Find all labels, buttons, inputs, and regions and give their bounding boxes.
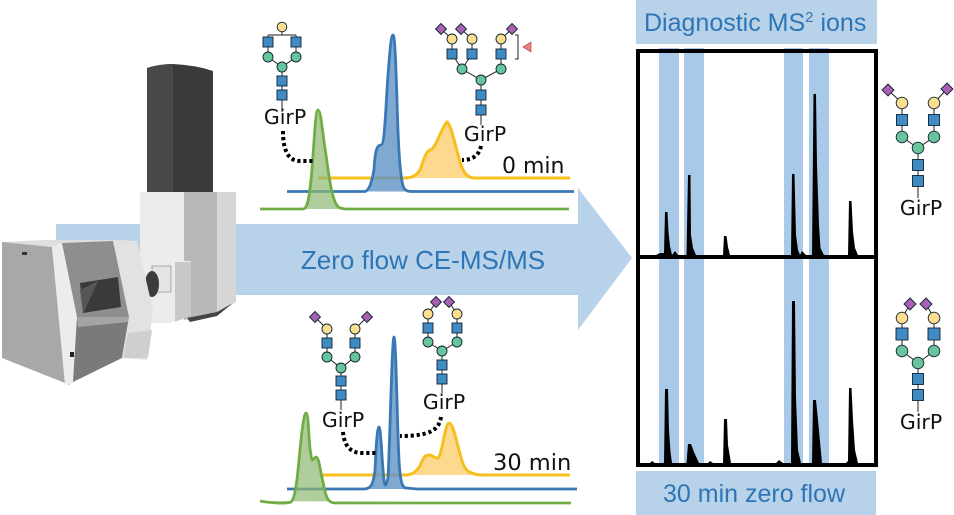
glycan: bottom left: GirP xyxy=(322,408,364,432)
glycan: top left xyxy=(263,22,306,129)
dotted connector: right glycan to yellow peak xyxy=(462,146,481,160)
glycan: bottom right xyxy=(423,296,465,414)
chromatogram: 30 min xyxy=(260,337,577,503)
yellow trace 0 min xyxy=(318,122,570,178)
header: diagnostic MS2 ions xyxy=(636,0,877,44)
glycan: bottom right: GirP xyxy=(423,390,465,414)
glycan: top right with fucose: GirP xyxy=(464,122,506,146)
glycan: top right with fucose xyxy=(436,24,531,146)
spectrum: 0 min xyxy=(640,94,874,258)
label: zero flow CE-MS/MS: Zero flow CE-MS/MS xyxy=(301,245,545,275)
glycan: right top xyxy=(882,83,953,220)
glycan: right top: GirP xyxy=(900,196,942,220)
spectrum: 30 min xyxy=(640,301,874,466)
chromatogram: 0 min xyxy=(260,35,574,209)
footer: 30 min zero flow: 30 min zero flow xyxy=(663,480,846,508)
highlighted diagnostic ion bands xyxy=(659,48,829,463)
header: diagnostic MS2 ions: Diagnostic MS xyxy=(644,9,805,37)
glycan: right bottom xyxy=(896,298,942,434)
glycan: bottom left xyxy=(310,312,372,432)
header: diagnostic MS2 ions: ions xyxy=(814,9,866,37)
icon: CE-MS instrument xyxy=(2,64,236,385)
glycan: top left: GirP xyxy=(264,105,306,129)
blue trace 0 min xyxy=(287,35,574,192)
plot frame xyxy=(638,51,876,465)
glycan: right bottom: GirP xyxy=(900,410,942,434)
green trace 30 min xyxy=(260,413,571,503)
arrow: zero flow direction xyxy=(56,188,632,330)
panel: MS2 spectra xyxy=(638,48,876,466)
dotted connector: right glycan to blue peak xyxy=(400,417,441,436)
yellow trace 30 min xyxy=(322,423,570,475)
green trace 0 min xyxy=(260,110,569,209)
dotted connector: left glycan to blue peak xyxy=(343,432,376,453)
blue trace 30 min xyxy=(287,337,577,489)
label: 30 min: 30 min xyxy=(493,450,571,476)
label: 0 min: 0 min xyxy=(502,154,564,179)
footer: 30 min zero flow xyxy=(636,471,876,515)
dotted connector: left glycan to green peak xyxy=(283,131,314,161)
header: diagnostic MS2 ions: 2 xyxy=(805,9,814,26)
